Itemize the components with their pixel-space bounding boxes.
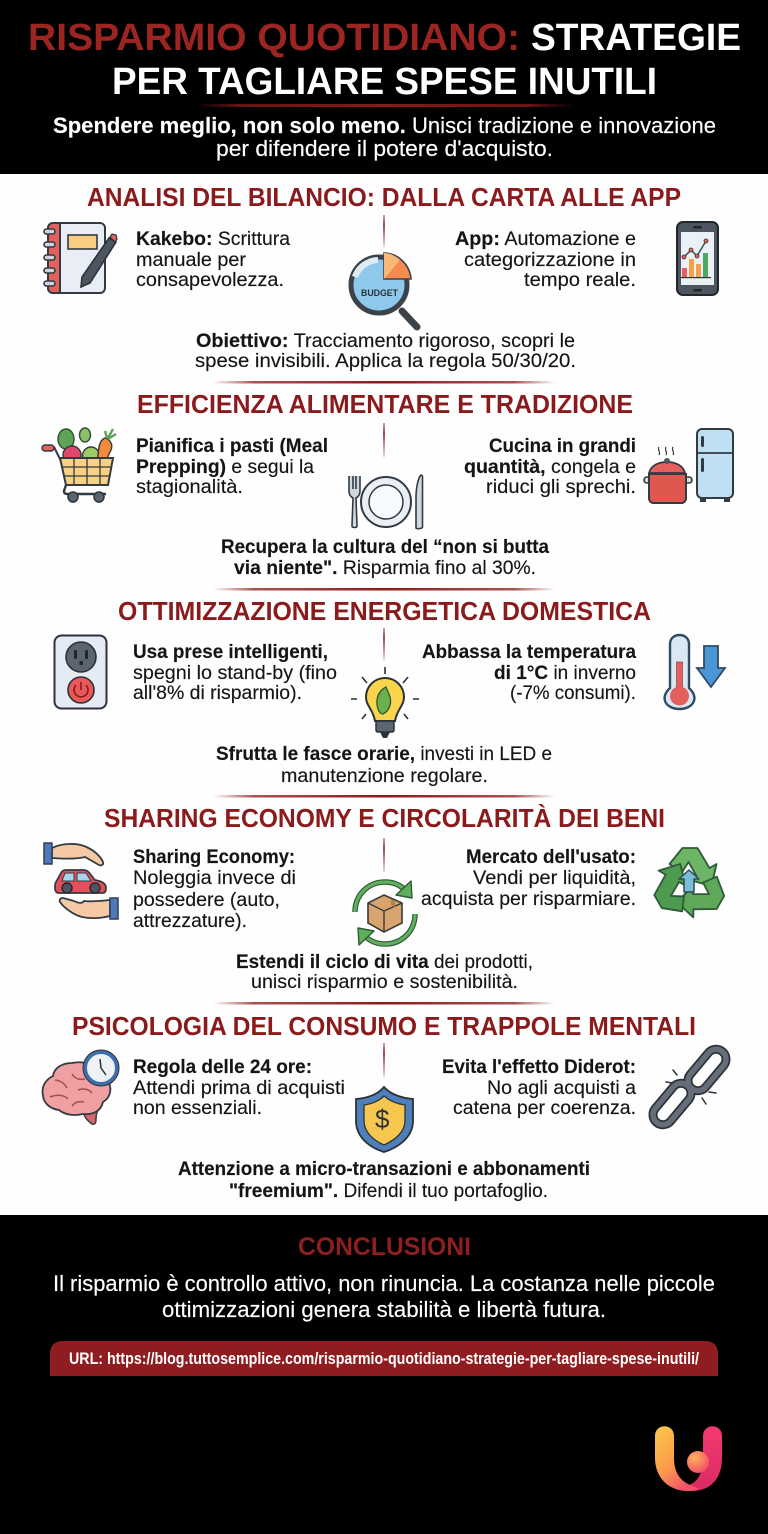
text: kakebo: consapevolezza. (136, 269, 284, 291)
icon: brain with clock (42, 1050, 119, 1124)
text: mercato dell'usato: Vendi per liquidità, (473, 867, 636, 889)
heading: ANALISI DEL BILANCIO: DALLA CARTA ALLE APP (87, 184, 681, 212)
text: micro-transazioni (178, 1158, 590, 1202)
text: sharing economy: possedere (auto, (133, 889, 280, 911)
icon: thermometer and down arrow (665, 635, 725, 709)
text: cucina in grandi quantita (464, 435, 636, 498)
icon: budget magnifier: BUDGET (361, 288, 398, 299)
subtitle: Spendere meglio, non solo meno. Unisci tradizione e innovazione (53, 113, 716, 138)
text: app (455, 228, 636, 291)
icon: notebook and pen (44, 223, 117, 293)
title: RISPARMIO QUOTIDIANO: (28, 17, 520, 59)
text: abbassa la temperatura: Abbassa la temperatura (422, 641, 636, 663)
text: mercato dell'usato: acquista per risparmiare. (421, 888, 636, 910)
text: conclusion body (53, 1271, 715, 1322)
text: prese intelligenti: all'8% di risparmio). (133, 682, 302, 704)
text: prese intelligenti: Usa prese intelligenti, (133, 641, 328, 663)
icon: smart plug (54, 636, 106, 708)
text: cucina in grandi quantita: Cucina in grandi (489, 435, 636, 457)
panel: efficienza alimentare (42, 391, 733, 590)
heading: PSICOLOGIA DEL CONSUMO E TRAPPOLE MENTALI (72, 1013, 696, 1041)
text: micro-transazioni: "freemium". Difendi il tuo portafoglio. (229, 1180, 548, 1202)
text: cucina in grandi quantita: quantità, congela e (464, 456, 636, 478)
text: regola delle 24 ore (133, 1056, 345, 1119)
heading: conclusioni: CONCLUSIONI (298, 1233, 471, 1261)
text: mercato dell'usato (421, 846, 636, 910)
panel: conclusioni (50, 1233, 718, 1376)
title: PER TAGLIARE SPESE INUTILI (112, 61, 657, 103)
icon: plate and cutlery (349, 475, 422, 529)
text: sfrutta le fasce orarie (216, 743, 552, 787)
text: sfrutta le fasce orarie: manutenzione regolare. (281, 765, 488, 787)
subtitle (53, 113, 716, 161)
text: pianifica i pasti: stagionalità. (136, 476, 243, 498)
icon: recycle with house (645, 848, 731, 925)
text: sharing economy: attrezzature). (133, 910, 247, 932)
text: effetto diderot: No agli acquisti a (487, 1077, 636, 1099)
text: conclusion body: ottimizzazioni genera stabilità e libertà futura. (162, 1297, 606, 1322)
text: cucina in grandi quantita: riduci gli sprechi. (486, 476, 636, 498)
text: effetto diderot: Evita l'effetto Diderot: (442, 1056, 636, 1078)
title (28, 17, 741, 103)
text: regola delle 24 ore: Attendi prima di acquisti (133, 1077, 345, 1099)
text: sharing economy (133, 846, 296, 932)
icon: logo (655, 1426, 722, 1491)
icon: budget magnifier (351, 253, 417, 327)
panel: psicologia del consumo (42, 1013, 730, 1202)
icon: light bulb with leaf (351, 667, 419, 738)
text: app: tempo reale. (524, 269, 636, 291)
text: obiettivo (195, 330, 576, 372)
icon: circular economy box (355, 881, 415, 945)
text: pianifica i pasti: Prepping) e segui la (136, 456, 314, 478)
text: effetto diderot (442, 1056, 636, 1119)
text: obiettivo: spese invisibili. Applica la regola 50/30/20. (195, 350, 576, 372)
title: STRATEGIE (531, 17, 741, 59)
text: prese intelligenti: spegni lo stand-by (fino (133, 662, 337, 684)
text: prese intelligenti (133, 641, 337, 704)
icon: shield with dollar (356, 1087, 413, 1152)
text: abbassa la temperatura: (-7% consumi). (510, 682, 636, 704)
text: estendi il ciclo di vita: unisci risparmio e sostenibilità. (251, 971, 518, 993)
text: abbassa la temperatura (422, 641, 636, 704)
icon: shopping cart with vegetables (42, 428, 116, 502)
icon: smartphone chart (677, 222, 718, 295)
panel: content background (0, 174, 768, 1215)
panel: analisi del bilancio (44, 184, 718, 384)
heading: OTTIMIZZAZIONE ENERGETICA DOMESTICA (118, 598, 651, 626)
text: abbassa la temperatura: di 1°C in inverno (494, 662, 636, 684)
text: estendi il ciclo di vita: Estendi il ciclo di vita dei prodotti, (236, 951, 533, 973)
text: kakebo (136, 228, 290, 291)
text: regola delle 24 ore: Regola delle 24 ore: (133, 1056, 312, 1078)
text: obiettivo: Obiettivo: Tracciamento rigoroso, scopri le (196, 330, 575, 352)
text: app: App: Automazione e (455, 228, 636, 250)
panel: sharing economy (44, 804, 731, 1004)
text: recupera la cultura: Recupera la cultura del “non si butta (221, 536, 549, 558)
text: micro-transazioni: Attenzione a micro-transazioni e abbonamenti (178, 1158, 590, 1180)
text: app: categorizzazione in (464, 249, 636, 271)
text: pianifica i pasti (136, 435, 328, 498)
text: kakebo: manuale per (136, 249, 247, 271)
text: regola delle 24 ore: non essenziali. (133, 1097, 262, 1119)
header (28, 17, 741, 161)
icon: broken chain (649, 1045, 730, 1129)
url bar (50, 1341, 718, 1376)
text: mercato dell'usato: Mercato dell'usato: (466, 846, 636, 868)
text: recupera la cultura (221, 536, 549, 579)
text: sfrutta le fasce orarie: Sfrutta le fasce orarie, investi in LED e (216, 743, 552, 765)
text: effetto diderot: catena per coerenza. (453, 1097, 636, 1119)
text: sharing economy: Sharing Economy: (133, 846, 295, 868)
icon: hands holding a car (44, 843, 118, 919)
text: recupera la cultura: via niente". Risparmia fino al 30%. (234, 557, 536, 579)
heading: SHARING ECONOMY E CIRCOLARITÀ DEI BENI (104, 804, 665, 833)
text: kakebo: Kakebo: Scrittura (136, 228, 290, 250)
panel: ottimizzazione energetica (54, 598, 725, 798)
heading: EFFICIENZA ALIMENTARE E TRADIZIONE (137, 391, 633, 419)
text: pianifica i pasti: Pianifica i pasti (Meal (136, 435, 328, 457)
text: sharing economy: Noleggia invece di (133, 867, 296, 889)
icon: shield with dollar: $ (375, 1104, 390, 1134)
text: estendi il ciclo di vita (236, 951, 533, 993)
icon: pot and fridge (644, 429, 733, 503)
subtitle: per difendere il potere d'acquisto. (216, 136, 553, 161)
text: conclusion body: Il risparmio è controllo attivo, non rinuncia. La costanza nelle piccole (53, 1271, 715, 1296)
